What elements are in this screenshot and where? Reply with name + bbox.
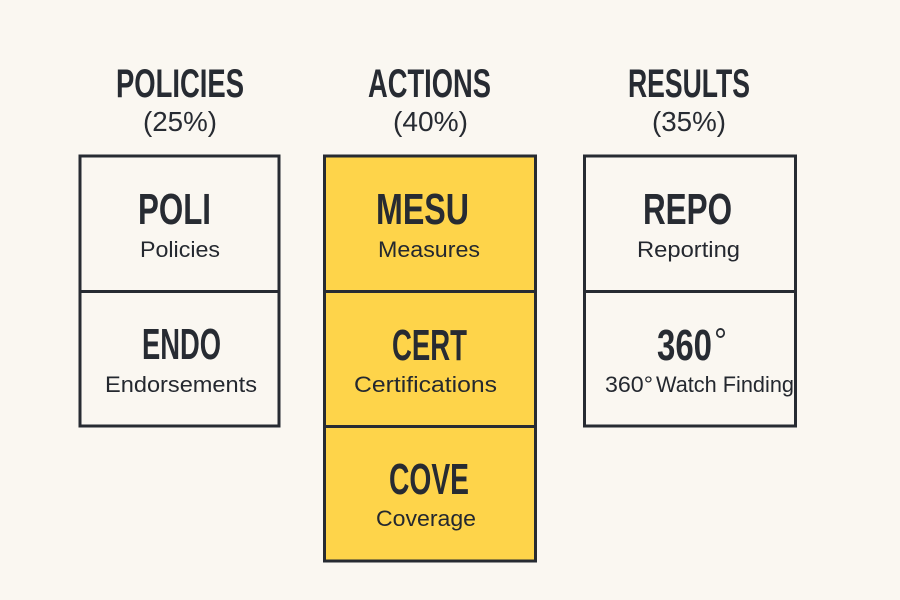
cell: COVE xyxy=(376,455,476,531)
cell: CERT xyxy=(354,321,497,397)
cell: ENDO: ENDO xyxy=(142,320,221,369)
cell: REPO: Reporting xyxy=(637,237,740,262)
cell: COVE: COVE xyxy=(389,455,469,504)
box frame: results xyxy=(584,156,796,426)
cell: 360 xyxy=(605,320,794,397)
heading: results: RESULTS xyxy=(628,62,750,106)
cell: CERT: CERT xyxy=(392,321,467,370)
cell: POLI: POLI xyxy=(138,185,211,234)
cell: 360: 360 xyxy=(657,321,712,370)
heading: actions: ACTIONS xyxy=(368,62,491,106)
heading: policies: POLICIES xyxy=(116,62,244,106)
cell: REPO: REPO xyxy=(643,185,732,234)
cell: MESU: Measures xyxy=(378,237,480,262)
cell: COVE: Coverage xyxy=(376,506,476,531)
cell: 360: Watch Finding xyxy=(656,372,794,397)
cell: CERT: Certifications xyxy=(354,372,497,397)
box frame: actions xyxy=(324,156,536,561)
cell: POLI xyxy=(138,185,220,262)
panel: actions column xyxy=(324,62,536,561)
panel: results column xyxy=(584,62,796,426)
panel: policies column xyxy=(80,62,279,426)
cell: 360: 360° xyxy=(605,372,653,397)
cell: REPO xyxy=(637,185,740,262)
cell: MESU: MESU xyxy=(376,185,469,234)
cell: ENDO xyxy=(105,320,257,397)
weight: 25%: (25%) xyxy=(143,106,217,137)
weight: 40%: (40%) xyxy=(393,106,468,137)
cell: MESU xyxy=(376,185,480,262)
cell: 360: ° xyxy=(714,320,727,361)
box frame: policies xyxy=(80,156,279,426)
cell: ENDO: Endorsements xyxy=(105,372,257,397)
weight: 35%: (35%) xyxy=(652,106,726,137)
cell: POLI: Policies xyxy=(140,237,220,262)
